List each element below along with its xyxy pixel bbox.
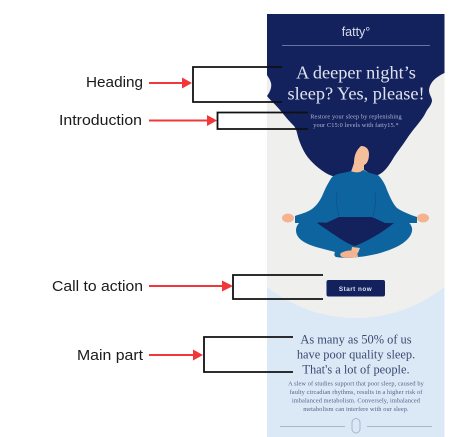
main part heading: have poor quality sleep.	[297, 348, 415, 362]
button: start now: Start now	[339, 286, 372, 293]
introduction: your C15:0 levels with fatty15.*	[313, 122, 399, 129]
main part body text: A slew of studies support that poor sleep, caused by	[288, 380, 425, 388]
face and neck	[351, 146, 369, 174]
introduction: Restore your sleep by replenishing	[310, 114, 402, 120]
main part body text: imbalanced metabolism. Conversely, imbalanced	[292, 398, 421, 404]
illustration: meditating woman	[282, 146, 429, 258]
sweater torso and arms	[295, 170, 417, 223]
panel: navy header with flowing hair	[267, 14, 444, 177]
annotation: main part: Main part	[77, 348, 143, 364]
footer divider with pill icon	[280, 418, 432, 433]
logo: fatty: fatty°	[342, 25, 370, 39]
annotation: heading: Heading	[86, 75, 143, 91]
main part heading: As many as 50% of us	[300, 332, 412, 346]
legs	[296, 221, 412, 258]
main part body text: faulty circadian rhythms, results in a higher risk of	[290, 389, 423, 396]
divider line	[282, 45, 430, 46]
hands	[282, 214, 429, 222]
heading: A deeper night’s	[296, 62, 416, 82]
feet	[351, 247, 360, 253]
annotation: introduction: Introduction	[59, 113, 142, 129]
main part body text: metabolism can interfere with our sleep.	[303, 406, 409, 413]
annotation: call to action: Call to action	[52, 279, 143, 295]
annotation: main part	[77, 337, 293, 372]
heading: sleep? Yes, please!	[287, 84, 425, 104]
annotation: introduction	[59, 112, 308, 129]
shorts	[317, 217, 394, 246]
panel: email background	[267, 14, 444, 437]
main part heading: That's a lot of people.	[302, 362, 410, 376]
button: start now	[326, 280, 385, 296]
annotation: call to action	[52, 275, 323, 299]
annotation: heading	[86, 67, 282, 102]
sweater fold lines	[337, 192, 375, 216]
